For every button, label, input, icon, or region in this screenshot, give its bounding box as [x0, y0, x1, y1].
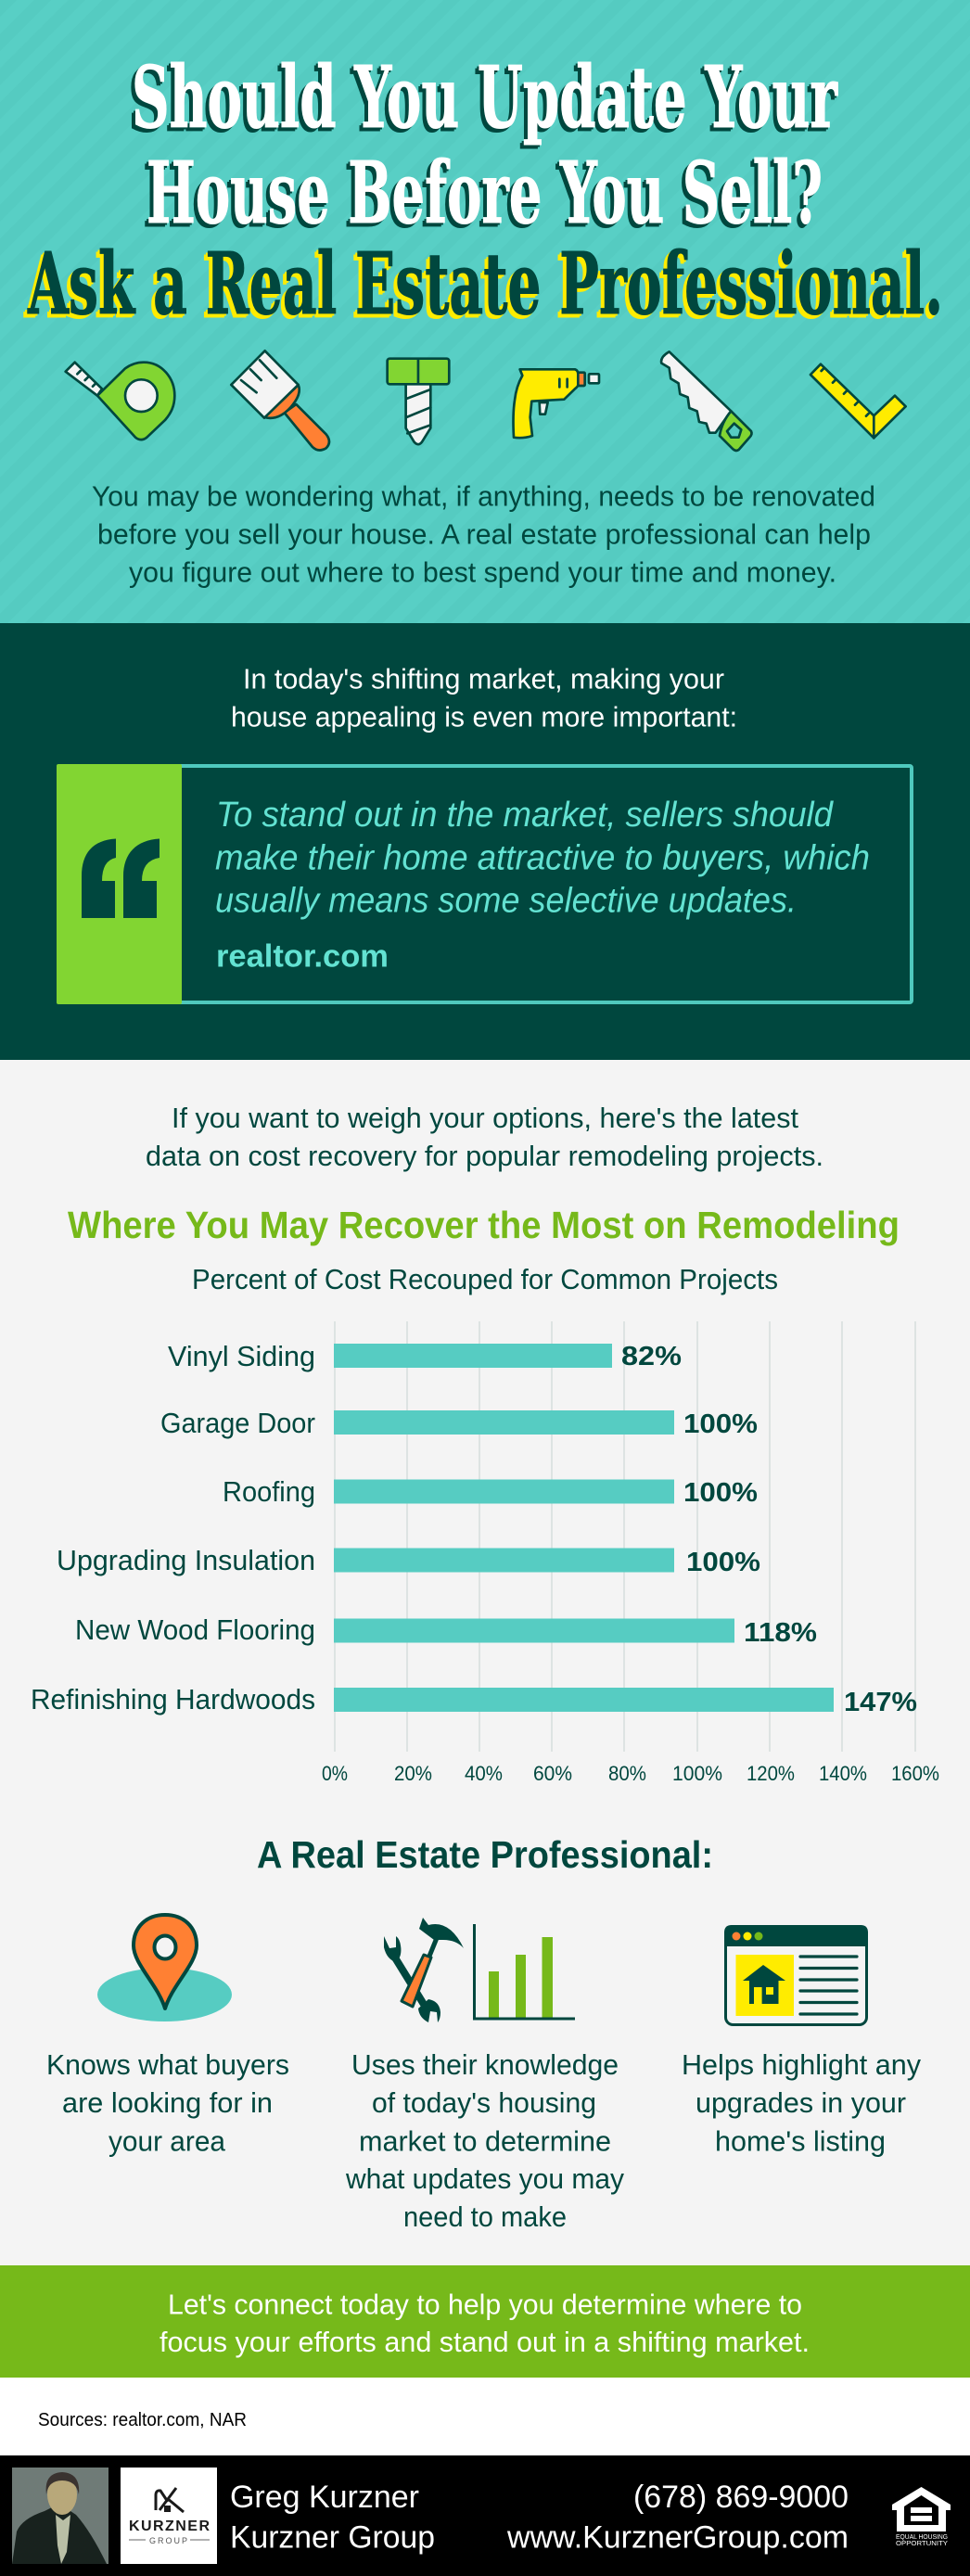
text: column 1: are looking for in [62, 2086, 273, 2119]
text: data intro [146, 1102, 823, 1172]
icon: carpenter square [810, 364, 906, 438]
bar chart [31, 1321, 939, 1785]
text: chart subtitle: Percent of Cost Recouped for Common Projects [192, 1263, 778, 1295]
text: quote source: realtor.com [216, 938, 389, 974]
hammer [402, 1918, 464, 2007]
text: column 1 [46, 2048, 289, 2157]
value labels: 82% [621, 1342, 682, 1371]
icon: equal housing opportunity: OPPORTUNITY [896, 2541, 948, 2547]
axis labels: 100% [672, 1762, 722, 1785]
text: market lead-in: house appealing is even more important: [231, 701, 737, 733]
text: agent name: Greg Kurzner [230, 2480, 419, 2515]
text: column 3: Helps highlight any [682, 2048, 921, 2081]
title [27, 47, 943, 334]
axis labels: 20% [394, 1762, 432, 1785]
text: column 2: Uses their knowledge [351, 2048, 619, 2081]
logo: Kurzner Group: GROUP [149, 2536, 187, 2545]
wrench [384, 1936, 440, 2022]
text: contact details [506, 2480, 849, 2556]
text: quote [215, 796, 870, 920]
category labels: Refinishing Hardwoods [31, 1683, 315, 1715]
text: column 3: upgrades in your [696, 2086, 906, 2119]
category labels [31, 1340, 315, 1715]
icon: tools and chart [384, 1918, 575, 2022]
text: quote: make their home attractive to buyers, which [215, 838, 870, 877]
axis labels [322, 1762, 939, 1785]
text: market lead-in: In today's shifting market, making your [243, 662, 724, 695]
text: quote: To stand out in the market, sellers should [216, 796, 835, 835]
text: column 2: need to make [403, 2200, 567, 2233]
text: contact details: (678) 869-9000 [633, 2480, 849, 2515]
icon: screw [388, 359, 449, 444]
text: column 1: Knows what buyers [46, 2048, 289, 2081]
panel: green call to action: focus your efforts and stand out in a shifting market. [160, 2326, 810, 2358]
icon: quotation mark [82, 838, 160, 918]
value labels: 100% [683, 1478, 758, 1508]
category labels: Garage Door [160, 1407, 315, 1439]
panel: sources strip: Sources: realtor.com, NAR [38, 2410, 247, 2430]
text: contact details: www.KurznerGroup.com [506, 2520, 849, 2556]
text: intro paragraph: You may be wondering what, if anything, needs to be renovated [92, 480, 875, 512]
icon: drill [514, 369, 599, 438]
category labels: Roofing [223, 1475, 315, 1508]
value labels [621, 1342, 917, 1717]
logo: Kurzner Group [121, 2468, 217, 2564]
panel: green call to action: Let's connect today to help you determine where to [168, 2289, 802, 2320]
text: column 3 [682, 2048, 921, 2157]
icon: paint brush [231, 351, 329, 450]
panel: green call to action [0, 2265, 970, 2378]
icon: website listing [724, 1925, 868, 2025]
text: intro paragraph [92, 480, 875, 588]
callout: quote box [57, 764, 912, 1004]
text: column 2: what updates you may [345, 2162, 624, 2195]
text: column 2: market to determine [359, 2125, 611, 2157]
text: data intro: If you want to weigh your options, here's the latest [172, 1102, 798, 1134]
text: column 2 [345, 2048, 624, 2233]
text: agent name: Kurzner Group [230, 2520, 435, 2556]
text: market lead-in [231, 662, 737, 733]
axis labels: 120% [747, 1762, 795, 1785]
logo: Kurzner Group: KURZNER [129, 2519, 210, 2534]
text: column 3: home's listing [715, 2125, 886, 2157]
text: column 1: your area [108, 2125, 226, 2157]
icon: equal housing opportunity [892, 2487, 951, 2547]
icon: hand saw [661, 351, 752, 451]
panel: light data section [0, 1060, 970, 2265]
small bar chart [475, 1924, 575, 2019]
category labels: Vinyl Siding [168, 1340, 315, 1372]
text: data intro: data on cost recovery for popular remodeling projects. [146, 1140, 823, 1172]
category labels: Upgrading Insulation [57, 1544, 315, 1576]
value labels: 100% [686, 1548, 760, 1577]
text: column 2: of today's housing [372, 2086, 596, 2119]
axis labels: 80% [608, 1762, 646, 1785]
text: intro paragraph: you figure out where to best spend your time and money. [129, 556, 836, 588]
panel: dark quote section [0, 623, 970, 1060]
bars [334, 1344, 834, 1712]
panel: sources strip [0, 2378, 970, 2455]
axis labels: 160% [891, 1762, 939, 1785]
value labels: 118% [744, 1618, 817, 1648]
heading: chart title: Where You May Recover the Most on Remodeling [68, 1204, 900, 1246]
icon: equal housing opportunity: EQUAL HOUSING [896, 2534, 948, 2541]
panel: black footer [0, 2455, 970, 2576]
icon: tape measure [66, 363, 174, 440]
text: quote: usually means some selective updates. [215, 881, 797, 920]
icon: map pin [97, 1915, 232, 2021]
text: agent name [230, 2480, 435, 2556]
axis labels: 60% [533, 1762, 572, 1785]
axis labels: 0% [322, 1762, 348, 1785]
value labels: 147% [844, 1688, 917, 1717]
heading: a real estate professional: A Real Estate Professional: [257, 1833, 713, 1876]
axis labels: 40% [465, 1762, 503, 1785]
panel: teal header [0, 0, 970, 623]
photo: agent portrait [12, 2468, 108, 2564]
axis labels: 140% [819, 1762, 867, 1785]
value labels: 100% [683, 1409, 758, 1439]
category labels: New Wood Flooring [75, 1613, 315, 1646]
text: intro paragraph: before you sell your house. A real estate professional can help [97, 517, 871, 551]
